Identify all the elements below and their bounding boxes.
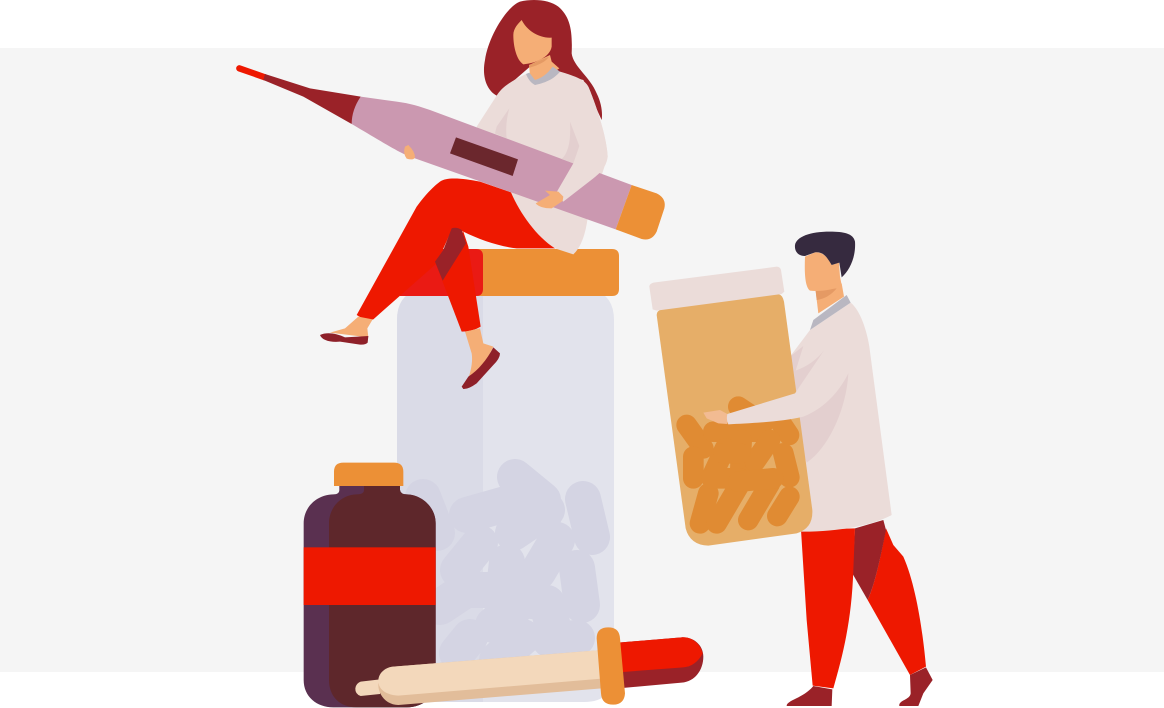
sleeve over thermometer [555,87,608,202]
man holding jar [649,232,933,706]
thermometer [239,68,665,240]
large pill jar [397,249,619,702]
orange collar [597,627,625,705]
front leg [801,528,855,688]
display [450,137,518,176]
face [513,20,552,64]
face [805,252,842,291]
shoes [787,686,832,706]
brown bottle [304,463,436,707]
label band [304,547,436,605]
hair [795,232,855,277]
bottle cap [334,463,403,486]
orange capsules [687,407,789,523]
jar lid [400,249,619,296]
sweater body [477,72,608,254]
jar capsules [423,477,592,660]
collar [810,295,851,330]
trousers [357,179,555,332]
woman with thermometer [239,0,665,389]
rubber bulb [618,637,703,688]
metal stem [263,74,361,124]
orange pill jar [649,267,812,546]
jar body [397,290,614,702]
feet [330,317,373,337]
coat shading [793,370,848,463]
back leg [868,528,926,675]
bottle front [329,486,436,707]
dropper [355,627,703,705]
hand [703,410,727,424]
shoes [320,333,368,345]
collar [526,67,560,85]
neck [529,55,559,85]
red tip [239,68,265,77]
thermometer body [352,97,632,229]
glass tube [378,650,602,705]
hands [404,145,415,159]
lab coat [790,303,892,532]
neck [816,283,844,313]
hair [484,0,602,120]
orange cap [616,185,665,240]
bottle back [304,486,436,707]
jar lid [649,267,784,311]
jar body [657,294,812,546]
bottle and dropper [304,463,703,707]
trouser shadow [435,228,466,281]
arm [727,350,848,424]
sweater shading [495,108,509,138]
glass tip [355,679,380,696]
